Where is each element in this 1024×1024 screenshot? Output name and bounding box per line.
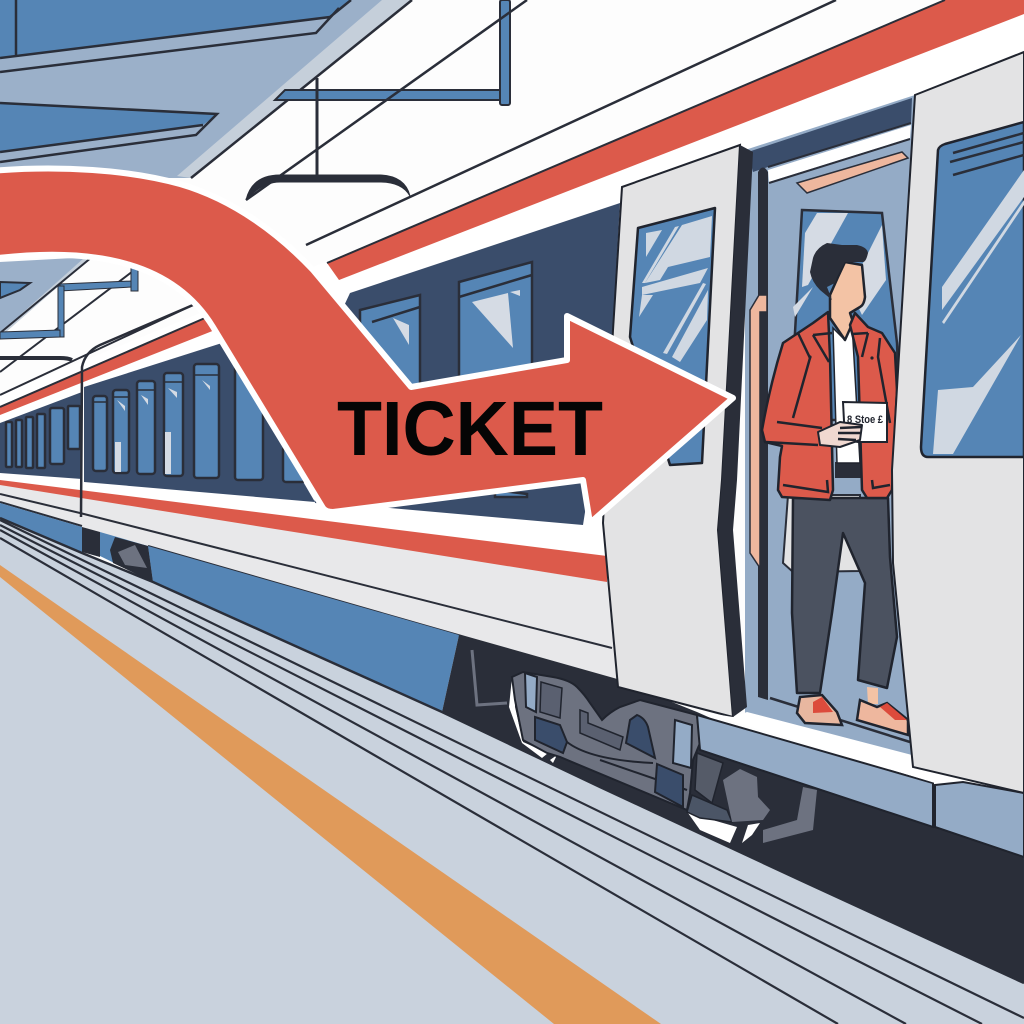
interior window xyxy=(790,210,900,420)
platform and tracks xyxy=(0,518,1024,1024)
pants xyxy=(792,498,897,693)
ceiling light xyxy=(797,152,908,193)
wheel crescents xyxy=(509,677,548,758)
ticket: 8 Stoe £ xyxy=(847,414,883,426)
shirt xyxy=(833,323,860,463)
seat panel xyxy=(783,495,860,572)
window reflections xyxy=(115,290,520,474)
jacket buttons xyxy=(808,355,874,360)
jacket xyxy=(762,312,833,500)
undercarriage xyxy=(442,635,1024,983)
windows xyxy=(6,262,532,497)
neck and face xyxy=(830,262,865,340)
right door xyxy=(892,52,1024,793)
handrail xyxy=(758,168,768,700)
blue skirt xyxy=(148,546,459,712)
navy window band xyxy=(0,392,82,479)
red arrow xyxy=(0,169,733,523)
door window xyxy=(630,208,715,465)
lower red stripe xyxy=(0,480,607,582)
door sill xyxy=(697,712,1024,857)
left door xyxy=(603,145,753,717)
bogie light panels xyxy=(525,673,692,768)
ticket xyxy=(843,402,887,442)
bogie frame xyxy=(512,672,700,810)
lower gray body xyxy=(0,483,617,680)
door opening interior xyxy=(745,95,915,770)
overhead catenary xyxy=(0,0,836,372)
label: TICKET xyxy=(337,386,603,472)
hand xyxy=(818,422,862,447)
person xyxy=(762,243,908,735)
station canopy xyxy=(0,0,412,333)
upper red stripe xyxy=(327,0,1024,280)
shoes xyxy=(797,695,842,725)
far bogie xyxy=(110,537,153,582)
train body xyxy=(0,0,1024,712)
bogie navy blocks xyxy=(535,715,683,807)
orange safety line xyxy=(0,565,661,1024)
carriage divider xyxy=(81,305,193,517)
hair xyxy=(810,243,868,300)
